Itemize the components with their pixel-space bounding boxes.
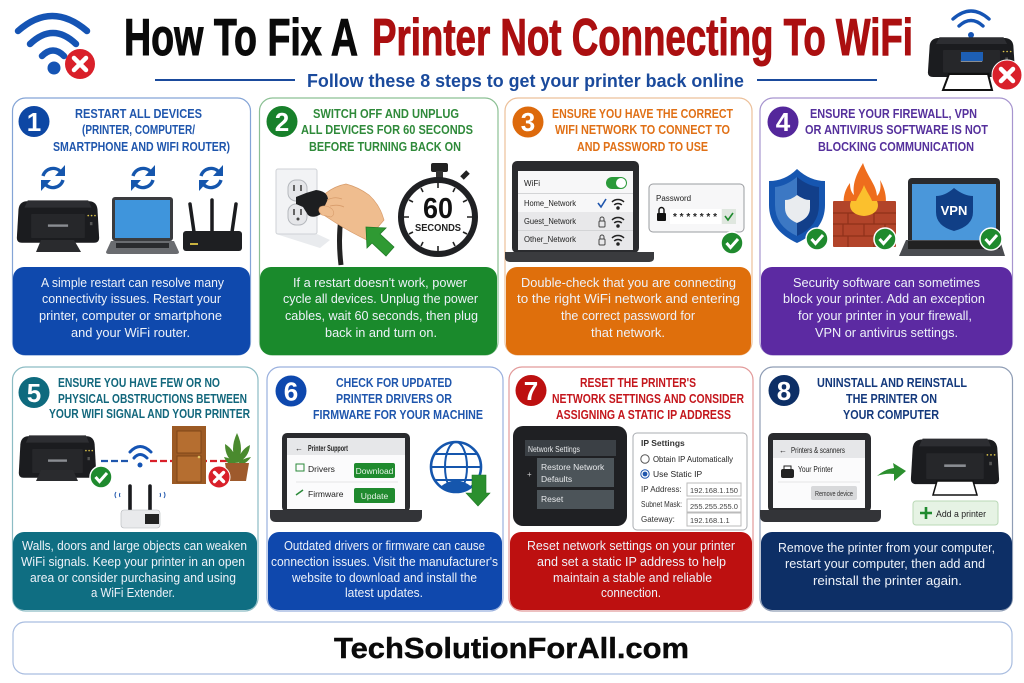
heading 6: FIRMWARE FOR YOUR MACHINE (313, 407, 483, 422)
icon: antivirus shield (769, 169, 825, 243)
heading 7: ASSIGNING A STATIC IP ADDRESS (556, 407, 731, 422)
description 2: cycle all devices. Unplug the power (283, 291, 479, 306)
check badge (721, 232, 743, 254)
description 3: to the right WiFi network and entering (517, 291, 740, 306)
laptop: printer support (270, 433, 422, 522)
laptop: printers and scanners: Printers & scanners (791, 446, 845, 455)
signal line blocked (101, 446, 228, 468)
step badge 6 (276, 376, 306, 406)
heading 1 (53, 106, 230, 154)
description 5 (13, 532, 257, 610)
add a printer button: Add a printer (936, 509, 986, 519)
IP settings box: Subnet Mask: (641, 500, 682, 509)
icon: stopwatch 60 seconds (401, 163, 475, 254)
heading 1: SMARTPHONE AND WIFI ROUTER) (53, 139, 230, 154)
description 7: maintain a stable and reliable (553, 570, 712, 585)
heading 4: OR ANTIVIRUS SOFTWARE IS NOT (805, 122, 988, 137)
description 8: reinstall the printer again. (813, 573, 962, 588)
description 3 (506, 267, 751, 355)
laptop: printers and scanners: ← (779, 446, 787, 455)
heading 4 (805, 106, 988, 154)
laptop: printers and scanners: Your Printer (798, 465, 833, 474)
heading 6: CHECK FOR UPDATED (336, 375, 452, 390)
description 8: Remove the printer from your computer, (778, 540, 995, 555)
description 4: for your printer in your firewall, (798, 308, 972, 323)
arrow (877, 463, 906, 481)
description 5: area or consider purchasing and using (30, 570, 236, 585)
error badge (208, 466, 230, 488)
description 7: and set a static IP address to help (537, 554, 726, 569)
printer screen: network settings: + (527, 470, 532, 479)
heading 5 (49, 375, 250, 421)
heading 5: PHYSICAL OBSTRUCTIONS BETWEEN (58, 391, 247, 406)
heading 1: RESTART ALL DEVICES (75, 106, 202, 121)
check badge shield (806, 228, 828, 250)
laptop: printer support: Download (356, 466, 394, 476)
icon: stopwatch 60 seconds: SECONDS (415, 223, 461, 234)
panel 2: unplug (260, 98, 498, 355)
heading 4: ENSURE YOUR FIREWALL, VPN (810, 106, 977, 121)
step badge 6: 6 (284, 376, 298, 406)
IP settings box: IP Address: (641, 485, 682, 494)
icon: VPN laptop (899, 178, 1005, 256)
laptop: printer support: Drivers (308, 464, 335, 474)
description 5: a WiFi Extender. (91, 585, 175, 600)
printer screen: network settings (513, 426, 627, 526)
title (124, 9, 913, 67)
description 6 (268, 532, 502, 610)
icon: globe with download arrow (431, 442, 490, 506)
panel 5: obstructions (12, 367, 258, 611)
description 4: VPN or antivirus settings. (815, 325, 958, 340)
printer screen: network settings: Reset (541, 494, 564, 504)
heading 5: ENSURE YOU HAVE FEW OR NO (58, 375, 220, 390)
icon: restart arrows (41, 165, 223, 191)
check badge firewall (874, 228, 896, 250)
heading 3 (552, 106, 733, 154)
printer screen: network settings: Network Settings (528, 445, 580, 454)
description 4: Security software can sometimes (793, 275, 980, 290)
description 4: block your printer. Add an exception (783, 291, 985, 306)
printer screen: network settings: Restore Network (541, 462, 605, 472)
description 1 (13, 267, 250, 355)
step badge 5: 5 (27, 378, 41, 408)
heading 5: YOUR WIFI SIGNAL AND YOUR PRINTER (49, 406, 250, 421)
step badge 1: 1 (27, 107, 41, 137)
description 1: printer, computer or smartphone (39, 308, 222, 323)
description 8: restart your computer, then add and (785, 556, 985, 571)
laptop: wifi list (505, 161, 654, 262)
step badge 4: 4 (776, 107, 791, 137)
description 3: that network. (591, 325, 665, 340)
description 7: connection. (601, 585, 661, 600)
add a printer button (913, 501, 998, 525)
description 6: connection issues. Visit the manufacturer's (271, 554, 498, 569)
step badge 8 (768, 375, 800, 406)
heading 7: NETWORK SETTINGS AND CONSIDER (552, 391, 744, 406)
description 1: A simple restart can resolve many (41, 275, 224, 290)
icon: green arrow (366, 227, 394, 256)
heading 8: THE PRINTER ON (846, 391, 937, 406)
icon: wall outlet (276, 169, 330, 248)
description 7: Reset network settings on your printer (527, 538, 736, 553)
IP settings box: 192.168.1.150 (690, 486, 738, 495)
laptop: wifi list: Guest_Network (524, 217, 577, 226)
panel 1: restart (12, 98, 250, 355)
description 5: Walls, doors and large objects can weaken (22, 538, 247, 553)
heading 1: (PRINTER, COMPUTER/ (82, 122, 195, 137)
description 3: Double-check that you are connecting (521, 275, 736, 290)
icon: router (115, 486, 165, 528)
footer website (13, 622, 1012, 674)
IP settings box: Gateway: (641, 515, 675, 524)
check badge (90, 466, 112, 488)
icon: printer with paper (911, 439, 999, 495)
icon: firewall (833, 163, 896, 247)
description 6: latest updates. (345, 585, 423, 600)
laptop: printer support: Firmware (308, 489, 344, 499)
laptop: printer support: Update (361, 491, 388, 501)
description 4 (761, 267, 1012, 355)
heading 2: BEFORE TURNING BACK ON (309, 139, 461, 154)
title: How To Fix A (124, 9, 358, 67)
panel 4: firewall VPN antivirus (760, 98, 1012, 355)
IP settings box: 255.255.255.0 (690, 502, 738, 511)
laptop: printers and scanners (760, 433, 881, 522)
description 2: cables, wait 60 seconds, then plug (285, 308, 478, 323)
description 8 (761, 532, 1012, 610)
icon: wifi with error badge (18, 16, 95, 79)
printer screen: network settings: Defaults (541, 474, 572, 484)
step badge 4 (768, 106, 798, 138)
heading 7: RESET THE PRINTER'S (580, 375, 696, 390)
footer website: TechSolutionForAll.com (334, 633, 689, 665)
IP settings box: Use Static IP (653, 469, 702, 479)
step badge 5 (18, 377, 50, 408)
step badge 1 (18, 106, 50, 137)
icon: door (172, 426, 206, 484)
description 6: Outdated drivers or firmware can cause (284, 538, 485, 553)
laptop: printer support: ← (295, 444, 303, 453)
icon: laptop (106, 197, 179, 254)
icon: printer with wifi and error badge (928, 11, 1022, 90)
heading 4: BLOCKING COMMUNICATION (818, 139, 974, 154)
laptop: wifi list: Home_Network (524, 199, 577, 208)
description 6: website to download and install the (291, 570, 477, 585)
heading 6: PRINTER DRIVERS OR (336, 391, 452, 406)
heading 8 (817, 375, 967, 422)
step badge 2 (266, 106, 298, 137)
heading 8: UNINSTALL AND REINSTALL (817, 375, 967, 390)
heading 2: SWITCH OFF AND UNPLUG (313, 106, 459, 121)
heading 8: YOUR COMPUTER (843, 407, 940, 422)
description 5: WiFi signals. Keep your printer in an open (21, 554, 245, 569)
description 2 (260, 267, 497, 355)
heading 3: AND PASSWORD TO USE (577, 139, 708, 154)
panel 6: drivers (267, 367, 503, 611)
laptop: wifi list: WiFi (524, 179, 540, 188)
heading 2: ALL DEVICES FOR 60 SECONDS (301, 122, 473, 137)
description 7 (510, 532, 752, 610)
laptop: printer support: Printer Support (308, 444, 348, 453)
password box: ******* (673, 212, 717, 223)
description 1: and your WiFi router. (71, 325, 190, 340)
step badge 7: 7 (524, 376, 538, 406)
description 3: the correct password for (561, 308, 696, 323)
panel 7: network reset (509, 367, 753, 611)
description 2: back in and turn on. (325, 325, 437, 340)
icon: printer (17, 200, 99, 252)
subtitle: Follow these 8 steps to get your printer back online (307, 71, 744, 91)
heading 3: ENSURE YOU HAVE THE CORRECT (552, 106, 733, 121)
heading 6 (313, 375, 483, 422)
step badge 8: 8 (777, 376, 791, 406)
icon: plant (224, 433, 251, 481)
IP settings box (633, 433, 747, 530)
step badge 3: 3 (521, 107, 535, 137)
heading 3: WIFI NETWORK TO CONNECT TO (555, 122, 730, 137)
IP settings box: 192.168.1.1 (690, 516, 730, 525)
panel 3: correct network (505, 98, 752, 355)
icon: printer (19, 435, 96, 481)
password box (649, 184, 744, 232)
icon: hand pulling plug (296, 184, 384, 265)
laptop: printers and scanners: Remove device (815, 491, 853, 498)
icon: router (183, 200, 242, 251)
password box: Password (656, 194, 691, 203)
heading 2 (301, 106, 473, 154)
step badge 2: 2 (275, 107, 289, 137)
description 1: connectivity issues. Restart your (42, 291, 222, 306)
step badge 3 (512, 106, 544, 138)
IP settings box: Obtain IP Automatically (653, 454, 734, 464)
icon: stopwatch 60 seconds: 60 (423, 193, 453, 225)
description 2: If a restart doesn't work, power (293, 275, 468, 290)
panel 8: reinstall (760, 367, 1012, 611)
step badge 7 (516, 375, 546, 406)
IP settings box: IP Settings (641, 438, 685, 448)
laptop: wifi list: Other_Network (524, 235, 577, 244)
icon: VPN laptop: VPN (941, 203, 967, 218)
check badge laptop (980, 228, 1002, 250)
heading 7 (552, 375, 744, 422)
